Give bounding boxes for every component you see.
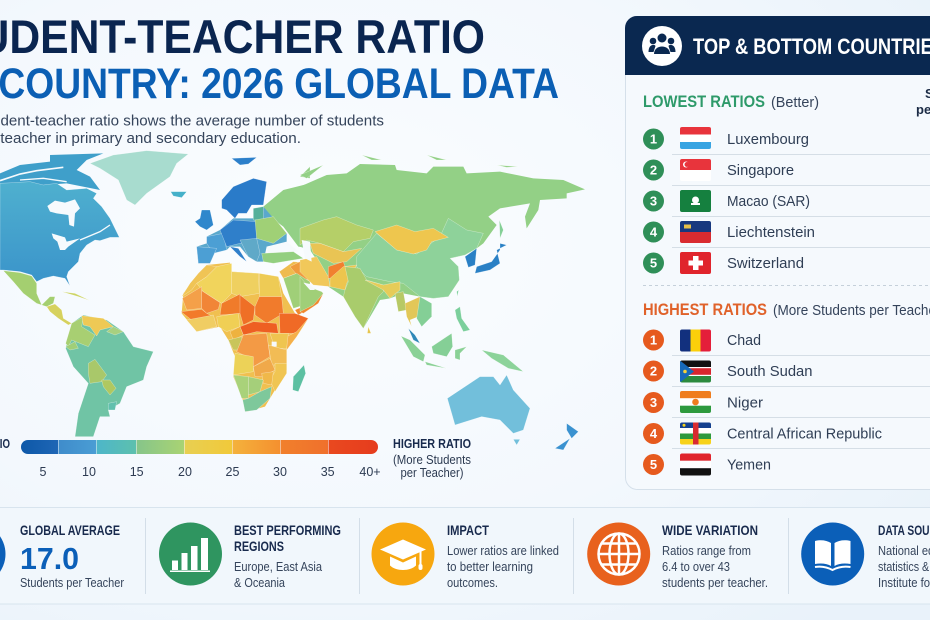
title: [0, 10, 559, 108]
bottom stats strip: [0, 508, 930, 604]
legend: colour scale: 20: [178, 465, 192, 479]
lowest ratios heading: (Better): [771, 95, 819, 111]
legend: colour scale: 35: [321, 465, 335, 479]
stat: impact: Lower ratios are linked: [447, 544, 559, 558]
row: Niger: 3: [650, 395, 657, 410]
panel: top and bottom countries: [625, 16, 930, 490]
stat: global average: [0, 522, 124, 590]
legend: colour scale: 30: [273, 465, 287, 479]
highest ratios heading: [643, 301, 930, 319]
map: Asia and Oceania: [300, 155, 585, 450]
stat: best performing regions: BEST PERFORMING: [234, 522, 341, 538]
row: Central African Republic: 4: [650, 426, 658, 441]
row: Yemen: [643, 454, 771, 476]
subtitle: [0, 112, 384, 147]
world map: [0, 151, 585, 450]
row: Macao: [643, 190, 810, 212]
stat: global average: GLOBAL AVERAGE: [20, 522, 120, 538]
stat: wide variation: WIDE VARIATION: [662, 522, 758, 538]
row: Luxembourg: Luxembourg: [727, 131, 809, 148]
row: Liechtenstein: 4: [650, 224, 658, 240]
row: Liechtenstein: [643, 221, 815, 243]
row: Switzerland: 5: [650, 256, 657, 270]
row: Yemen: 5: [650, 457, 657, 472]
row: Singapore: 2: [650, 162, 657, 178]
row: Chad: Chad: [727, 332, 761, 349]
row: Chad: [643, 330, 761, 352]
row: South Sudan: South Sudan: [727, 363, 812, 380]
legend: colour scale: [0, 437, 471, 480]
stat: data sources: [801, 522, 930, 590]
map: Americas and Atlantic: [0, 151, 320, 437]
legend: colour scale: (More Students: [393, 453, 471, 467]
row: Central African Republic: [643, 422, 882, 444]
lowest ratios heading: LOWEST RATIOS: [643, 93, 765, 111]
stat: best performing regions: [159, 522, 341, 590]
row: Luxembourg: 1: [650, 132, 657, 146]
row: Yemen: Yemen: [727, 456, 771, 474]
stat: impact: outcomes.: [447, 576, 498, 590]
row: Singapore: Singapore: [727, 162, 794, 179]
legend: colour scale: 15: [130, 465, 144, 479]
stat: global average: 17.0: [20, 541, 79, 576]
legend: colour scale: 25: [226, 465, 239, 479]
row: Switzerland: Switzerland: [727, 255, 804, 272]
stat: wide variation: students per teacher.: [662, 576, 768, 590]
legend: colour scale: per Teacher): [400, 466, 464, 480]
stat: impact: IMPACT: [447, 522, 489, 538]
row: Niger: [643, 391, 763, 413]
row: South Sudan: 2: [650, 364, 657, 378]
stat: wide variation: Ratios range from: [662, 544, 751, 558]
lowest ratios heading: [643, 86, 930, 117]
stat: impact: to better learning: [447, 560, 533, 574]
stat: global average: Students per Teacher: [20, 576, 124, 590]
row: South Sudan: [643, 360, 812, 382]
legend: colour scale: 5: [40, 465, 47, 479]
stat: wide variation: [587, 522, 768, 590]
row: Liechtenstein: Liechtenstein: [727, 224, 815, 241]
legend: colour scale: 40+: [359, 465, 381, 479]
highest ratios heading: HIGHEST RATIOS: [643, 301, 767, 319]
row: Singapore: [643, 159, 794, 181]
stat: best performing regions: REGIONS: [234, 538, 284, 554]
row: Switzerland: [643, 252, 804, 274]
stat: best performing regions: Europe, East Asia: [234, 560, 322, 574]
legend: colour scale: 10: [82, 465, 96, 479]
row: Central African Republic: Central African Republic: [727, 426, 882, 442]
panel header: [625, 16, 930, 75]
legend: colour scale: HIGHER RATIO: [393, 437, 471, 451]
row: Macao: 3: [650, 194, 657, 208]
stat: wide variation: 6.4 to over 43: [662, 560, 730, 574]
stat: impact: [372, 522, 559, 590]
row: Macao: Macao (SAR): [727, 193, 810, 210]
row: Niger: Niger: [727, 394, 763, 412]
stat: best performing regions: & Oceania: [234, 576, 285, 590]
row: Luxembourg: [643, 127, 809, 150]
row: Chad: 1: [650, 332, 657, 348]
